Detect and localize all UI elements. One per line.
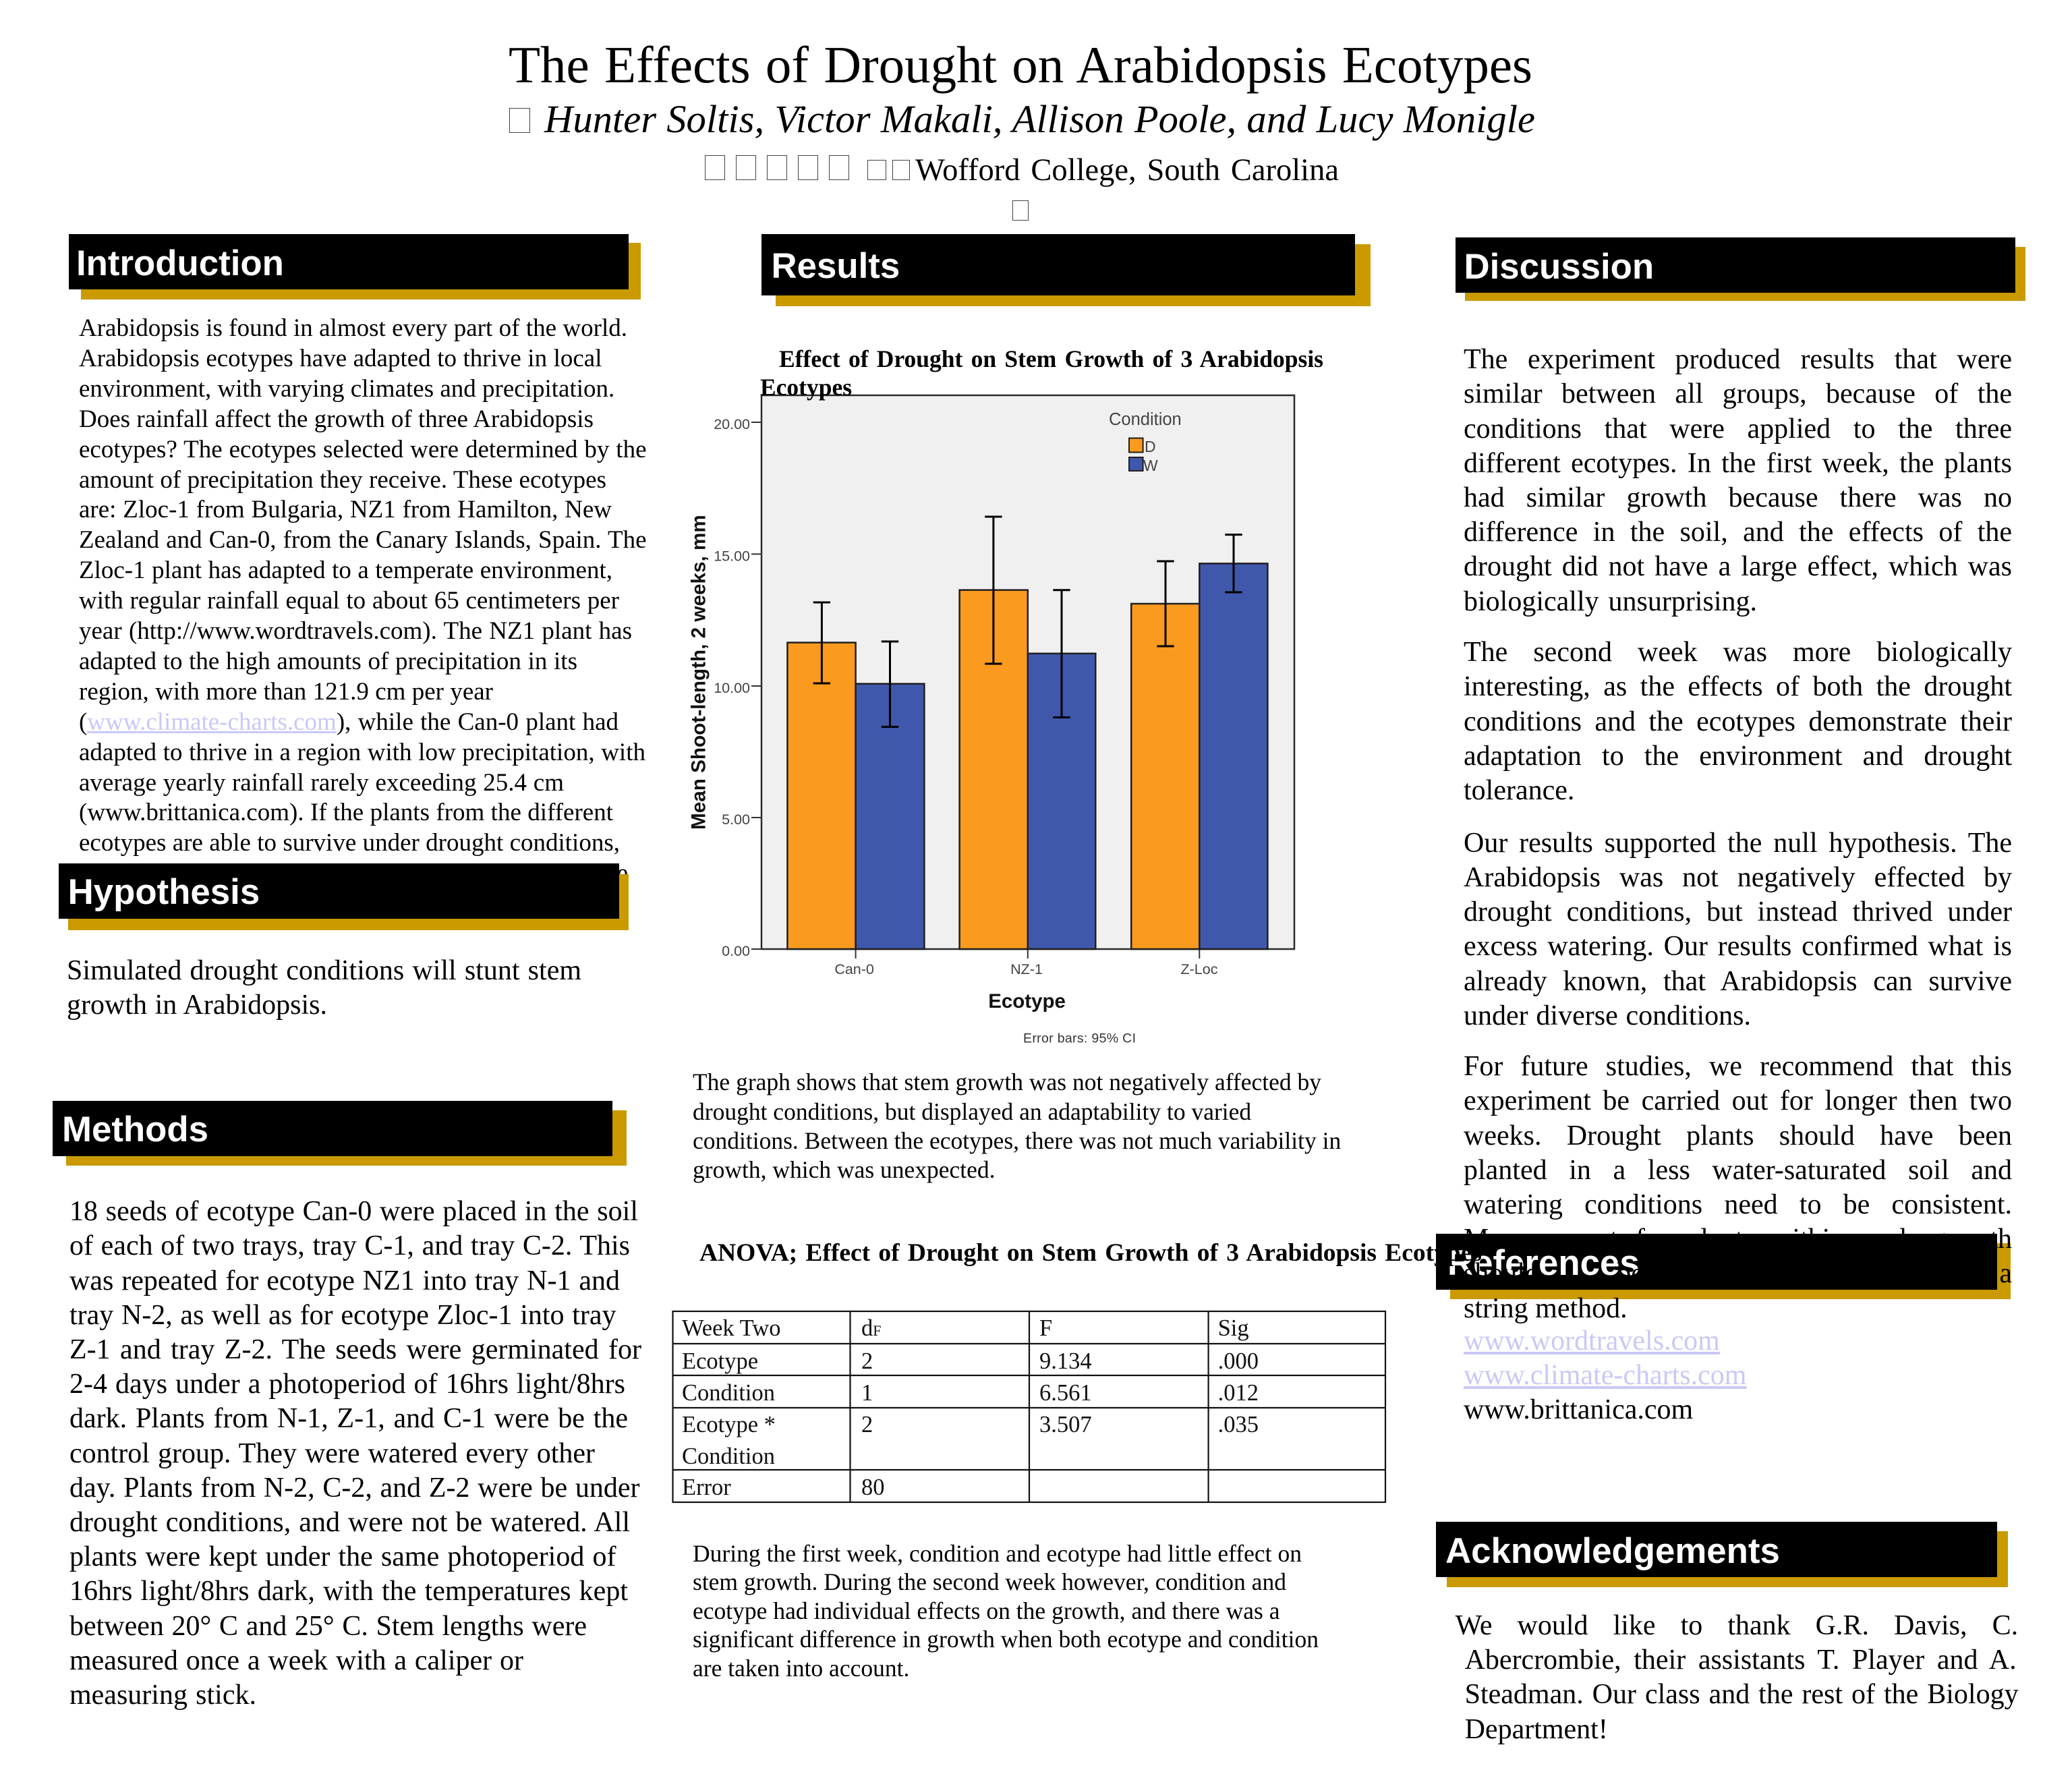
table: ANOVA results: Ecotype * — [682, 1412, 776, 1437]
text block: discussion: weeks. Drought plants should have been — [1464, 1120, 2012, 1151]
text block: chart caption: conditions. Between the ecotypes, there was not much variability in — [693, 1127, 1341, 1154]
text block: discussion: watering conditions need to be consistent. — [1464, 1189, 2012, 1220]
text block: introduction: (www.climate-charts.com), while the Can-0 plant had — [79, 708, 618, 736]
legend — [1109, 410, 1182, 474]
text block: discussion: excess watering. Our results confirmed what is — [1464, 931, 2012, 962]
text block: acknowledgements — [1456, 1610, 2019, 1745]
bar chart: mean shoot length by ecotype and condition — [688, 394, 1295, 1046]
text block: acknowledgements: Abercrombie, their assistants T. Player and A. — [1465, 1645, 2017, 1676]
table: ANOVA results: Sig — [1218, 1315, 1249, 1341]
chart title: Effect of Drought on Stem Growth of 3 Arabidopsis — [779, 345, 1323, 372]
legend: Condition — [1109, 410, 1182, 429]
text block: discussion: The second week was more biologically — [1464, 637, 2012, 668]
text block: methods: 16hrs light/8hrs dark, with the temperatures kept — [69, 1576, 628, 1607]
text block: methods: drought conditions, and were not be watered. All — [69, 1507, 630, 1538]
text block: chart caption: growth, which was unexpected. — [693, 1156, 996, 1183]
text block: introduction: amount of precipitation they receive. These ecotypes — [79, 465, 606, 494]
text block: methods: control group. They were watered every other — [69, 1438, 595, 1469]
text block: discussion: difference in the soil, and the effects of the — [1464, 517, 2012, 548]
x axis labels: Can-0 — [834, 961, 874, 977]
text block: discussion: conditions and the ecotypes demonstrate their — [1464, 706, 2012, 737]
text block: discussion: drought conditions, but instead thrived under — [1464, 896, 2012, 927]
panel heading: Methods: Methods — [62, 1110, 208, 1149]
text block: chart caption: The graph shows that stem growth was not negatively affected by — [693, 1068, 1321, 1095]
text block: introduction: then the durability and the ability of the plant will be — [79, 859, 628, 887]
x axis labels: NZ-1 — [1010, 961, 1043, 977]
text block: introduction: are: Zloc-1 from Bulgaria, NZ1 from Hamilton, New — [79, 496, 612, 523]
text block: discussion: similar between all groups, because of the — [1464, 378, 2012, 409]
affiliation line — [705, 153, 1339, 188]
table: ANOVA results: 2 — [861, 1412, 873, 1437]
affiliation line: Wofford College, South Carolina — [915, 153, 1339, 188]
legend: D — [1145, 438, 1156, 455]
text block: discussion: under diverse conditions. — [1464, 1000, 1751, 1031]
text block: methods: of each of two trays, tray C-1, and tray C-2. This — [69, 1230, 630, 1261]
text block: introduction: ecotypes? The ecotypes selected were determined by the — [79, 436, 646, 463]
text block: discussion: conditions that were applied to the three — [1464, 413, 2012, 445]
text block: introduction: Zealand and Can-0, from the Canary Islands, Spain. The — [79, 526, 646, 554]
text block: ANOVA caption: significant difference in growth when both ecotype and condition — [693, 1626, 1319, 1653]
authors line: Hunter Soltis, Victor Makali, Allison Poole, and Lucy Monigle — [544, 97, 1535, 141]
chart title: Ecotypes — [760, 374, 852, 401]
text block: introduction: average yearly rainfall rarely exceeding 25.4 cm — [79, 769, 564, 796]
text block: introduction — [79, 314, 646, 887]
panel heading: Hypothesis — [59, 863, 629, 930]
text block: discussion: already known, that Arabidopsis can survive — [1464, 966, 2012, 997]
text block: discussion: should be taken using a — [1464, 1258, 2012, 1289]
panel heading: References: References — [1447, 1243, 1640, 1283]
table: ANOVA results: 3.507 — [1039, 1412, 1092, 1437]
text block: methods — [69, 1196, 641, 1711]
text block: methods: tray N-2, as well as for ecotype Zloc-1 into tray — [69, 1300, 616, 1331]
y axis title: Mean Shoot-length, 2 weeks, mm — [688, 515, 710, 830]
panel heading: Acknowledgements: Acknowledgements — [1445, 1531, 1780, 1571]
table: ANOVA results: 80 — [861, 1475, 885, 1500]
text block: introduction: Zloc-1 plant has adapted to a temperate environment, — [79, 556, 612, 584]
x axis labels — [834, 961, 1218, 977]
text block: discussion: biologically unsurprising. — [1464, 586, 1757, 617]
text block: discussion — [1464, 344, 2012, 1324]
text block: methods: Z-1 and tray Z-2. The seeds were germinated for — [69, 1334, 641, 1365]
text block: discussion: tolerance. — [1464, 775, 1574, 806]
y axis labels: 10.00 — [714, 680, 750, 696]
panel heading: Results — [761, 234, 1371, 306]
text block: acknowledgements: We would like to thank G.R. Davis, C. — [1456, 1610, 2018, 1641]
text block: references — [1464, 1325, 1747, 1425]
plot area — [761, 395, 1294, 949]
table: ANOVA results: .012 — [1218, 1380, 1259, 1406]
missing glyph box — [1012, 200, 1029, 221]
text block: introduction: Does rainfall affect the growth of three Arabidopsis — [79, 405, 594, 433]
text block: references: www.wordtravels.com — [1464, 1325, 1720, 1357]
text block: hypothesis: growth in Arabidopsis. — [67, 990, 327, 1021]
text block: introduction: adapted to the high amounts of precipitation in its — [79, 648, 577, 675]
y axis labels: 20.00 — [714, 416, 750, 432]
panel heading: Discussion — [1456, 237, 2025, 301]
text block: methods: between 20° C and 25° C. Stem lengths were — [69, 1611, 587, 1642]
text block: methods: day. Plants from N-2, C-2, and Z-2 were be under — [69, 1473, 639, 1504]
table: ANOVA results: Condition — [682, 1380, 775, 1406]
text block: methods: 2-4 days under a photoperiod of 16hrs light/8hrs — [69, 1369, 625, 1400]
text block: discussion: had similar growth because there was no — [1464, 482, 2012, 513]
text block: chart caption — [693, 1068, 1341, 1183]
panel heading: Results: Results — [772, 246, 900, 286]
x axis labels: Z-Loc — [1181, 961, 1218, 977]
panel heading: Methods — [53, 1101, 627, 1166]
table: ANOVA results: .035 — [1218, 1412, 1259, 1437]
panel heading: Introduction: Introduction — [76, 244, 284, 283]
text block: methods: was repeated for ecotype NZ1 into tray N-1 and — [69, 1265, 620, 1296]
text block: discussion: Measurement for plants within each growth — [1464, 1224, 2012, 1255]
x axis title: Ecotype — [988, 990, 1066, 1012]
text block: discussion: planted in a less water-saturated soil and — [1464, 1155, 2012, 1186]
error bars — [813, 517, 1242, 727]
text block: discussion: interesting, as the effects of both the drought — [1464, 671, 2012, 702]
text block: introduction: environment, with varying climates and precipitation. — [79, 375, 614, 403]
text block: ANOVA caption: During the first week, condition and ecotype had little effect on — [693, 1539, 1302, 1566]
text block: ANOVA caption: are taken into account. — [693, 1655, 909, 1682]
panel heading: References — [1436, 1234, 2011, 1299]
text block: ANOVA caption — [693, 1539, 1319, 1682]
panel heading: Introduction — [69, 234, 641, 299]
text block: discussion: string method. — [1464, 1293, 1628, 1324]
y axis labels — [714, 416, 750, 959]
text block: methods: plants were kept under the same photoperiod of — [69, 1541, 616, 1572]
chart title — [760, 345, 1323, 401]
text block: methods: measuring stick. — [69, 1680, 256, 1711]
y axis labels: 5.00 — [722, 811, 750, 828]
text block: ANOVA caption: ecotype had individual effects on the growth, and there was a — [693, 1597, 1280, 1624]
text block: discussion: experiment be carried out for longer then two — [1464, 1085, 2012, 1116]
text block: acknowledgements: Steadman. Our class and the rest of the Biology — [1465, 1679, 2019, 1710]
text block: discussion: Our results supported the null hypothesis. The — [1464, 828, 2012, 859]
text block: introduction: Arabidopsis is found in almost every part of the world. — [79, 314, 627, 342]
text block: introduction: year (http://www.wordtravels.com). The NZ1 plant has — [79, 617, 632, 645]
table: ANOVA results — [672, 1310, 1387, 1503]
table: ANOVA results: 9.134 — [1039, 1348, 1092, 1374]
text block: introduction: (www.brittanica.com). If the plants from the different — [79, 799, 613, 826]
text block: methods: measured once a week with a caliper or — [69, 1645, 523, 1676]
legend: W — [1143, 457, 1158, 474]
table: ANOVA results: 2 — [861, 1348, 873, 1374]
table: ANOVA results: 6.561 — [1039, 1380, 1092, 1406]
text block: hypothesis — [67, 955, 581, 1021]
table: ANOVA results: F — [1039, 1315, 1052, 1341]
text block: discussion: The experiment produced results that were — [1464, 344, 2012, 375]
panel heading: Acknowledgements — [1436, 1522, 2008, 1587]
y axis labels: 0.00 — [722, 943, 750, 959]
y axis labels: 15.00 — [714, 548, 750, 564]
y axis ticks — [751, 422, 1199, 959]
text block: introduction: region, with more than 121.9 cm per year — [79, 678, 493, 706]
text block: chart caption: drought conditions, but displayed an adaptability to varied — [693, 1098, 1251, 1125]
text block: introduction: ecotypes are able to survive under drought conditions, — [79, 829, 620, 857]
table: ANOVA results: dF — [861, 1315, 881, 1341]
text block: discussion: adaptation to the environment and drought — [1464, 741, 2012, 772]
text block: discussion: Arabidopsis was not negatively effected by — [1464, 862, 2012, 893]
table: ANOVA results: 1 — [861, 1380, 873, 1406]
text block: acknowledgements: Department! — [1465, 1714, 1608, 1745]
table: ANOVA results: Ecotype — [682, 1348, 758, 1374]
text block: introduction: with regular rainfall equal to about 65 centimeters per — [79, 587, 619, 615]
table: ANOVA results: .000 — [1218, 1348, 1259, 1374]
text block: introduction: adapted to thrive in a region with low precipitation, with — [79, 739, 645, 766]
bars — [787, 563, 1267, 949]
text block: discussion: drought did not have a large effect, which was — [1464, 551, 2012, 582]
text block: ANOVA caption: stem growth. During the second week however, condition and — [693, 1568, 1286, 1595]
panel heading: Discussion: Discussion — [1464, 247, 1654, 287]
text block: references: www.climate-charts.com — [1464, 1360, 1746, 1391]
text block: references: www.brittanica.com — [1464, 1394, 1693, 1425]
text block: methods: dark. Plants from N-1, Z-1, and C-1 were be the — [69, 1403, 628, 1434]
error bar note: Error bars: 95% CI — [1023, 1031, 1136, 1046]
table: ANOVA results: Week Two — [682, 1315, 781, 1341]
text block: introduction: Arabidopsis ecotypes have adapted to thrive in local — [79, 345, 602, 372]
table: ANOVA results: Condition — [682, 1444, 775, 1469]
text block: hypothesis: Simulated drought conditions will stunt stem — [67, 955, 581, 986]
text block: discussion: different ecotypes. In the first week, the plants — [1464, 448, 2012, 479]
table: ANOVA results: Error — [682, 1475, 731, 1500]
table heading: ANOVA title: ANOVA; Effect of Drought on Stem Growth of 3 Arabidopsis Ecotypes — [699, 1239, 1482, 1267]
panel heading: Hypothesis: Hypothesis — [68, 872, 260, 912]
text block: discussion: For future studies, we recommend that this — [1464, 1051, 2012, 1082]
title: The Effects of Drought on Arabidopsis Ecotypes — [509, 36, 1532, 94]
text block: methods: 18 seeds of ecotype Can-0 were placed in the soil — [69, 1196, 638, 1227]
